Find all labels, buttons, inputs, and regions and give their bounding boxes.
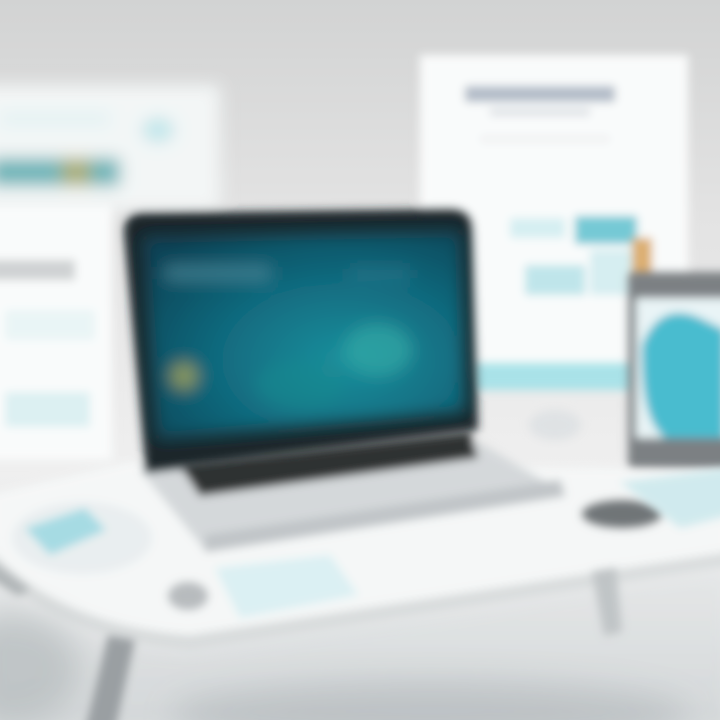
paper: desk note xyxy=(215,555,358,618)
cup: small item xyxy=(529,410,581,440)
paper: right desk sheet xyxy=(620,468,720,528)
device: mouse xyxy=(168,582,208,610)
laptop base xyxy=(140,432,565,552)
laptop xyxy=(124,209,565,552)
device: right desk mouse xyxy=(582,500,662,528)
report chart xyxy=(575,216,637,244)
panel: right tablet xyxy=(628,272,720,470)
panel: left rear chart poster xyxy=(0,85,220,210)
report heading xyxy=(465,86,615,102)
laptop screen xyxy=(142,230,466,440)
panel: right rear report poster xyxy=(420,55,688,375)
device: left desk tablet xyxy=(12,502,152,574)
desk legs xyxy=(0,560,622,720)
laptop lid xyxy=(124,209,478,472)
band: teal strip xyxy=(475,363,640,390)
floor xyxy=(0,566,720,720)
panel: left front document xyxy=(0,205,112,460)
desk surface xyxy=(0,462,720,650)
